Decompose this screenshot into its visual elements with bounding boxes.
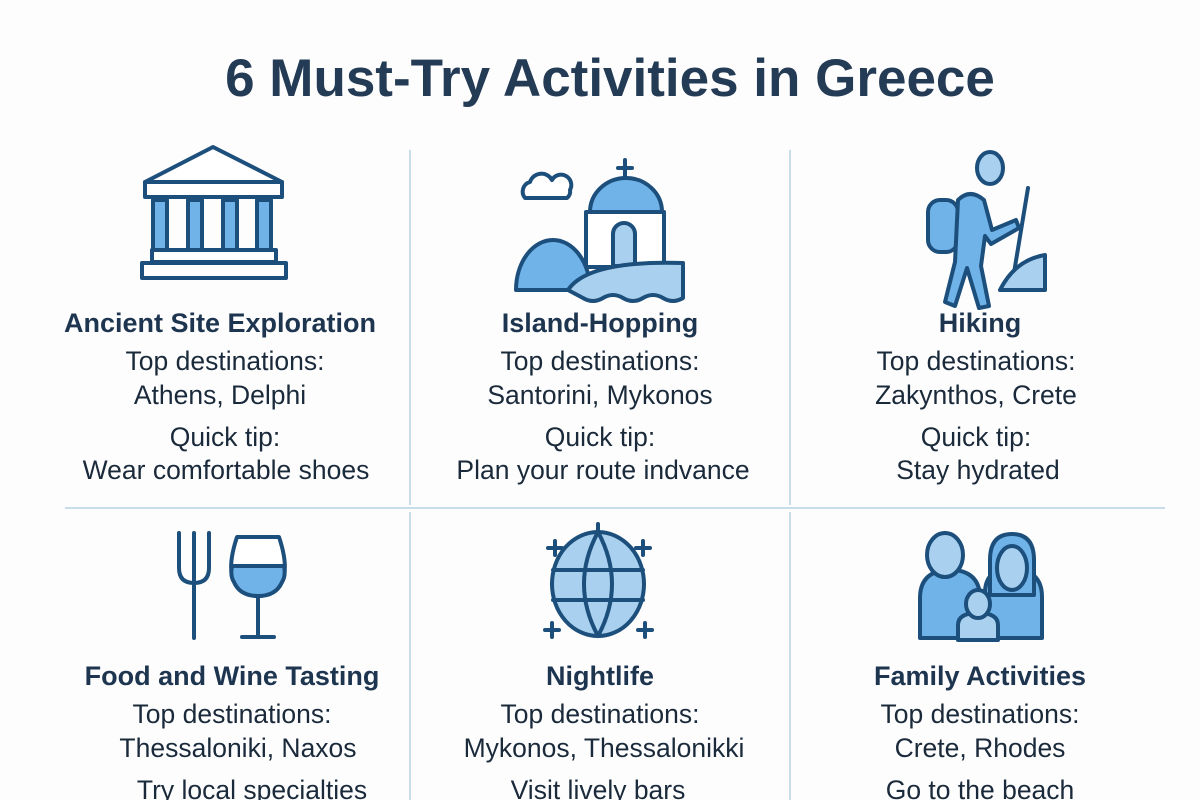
heading: Ancient Site Exploration xyxy=(64,308,376,338)
panel: ancient sites: Wear comfortable shoes xyxy=(83,455,369,485)
heading: Hiking xyxy=(939,308,1021,338)
heading: Family Activities xyxy=(874,661,1086,691)
heading: Food and Wine Tasting xyxy=(85,661,379,691)
text block: Top destinations: xyxy=(501,699,699,729)
panel: food and wine: Thessaloniki, Naxos xyxy=(119,733,357,763)
text block: Top destinations: xyxy=(501,346,699,376)
icon: disco ball xyxy=(545,524,652,637)
panel: family: Crete, Rhodes xyxy=(895,733,1065,763)
panel: hiking xyxy=(875,152,1077,485)
icon: family xyxy=(920,533,1042,640)
icon: hiker xyxy=(928,152,1045,308)
panel: family xyxy=(874,533,1086,800)
icon: island church xyxy=(516,160,683,301)
panel: ancient sites: Quick tip: xyxy=(170,422,280,452)
panel: hiking: Zakynthos, Crete xyxy=(875,380,1077,410)
panel: food and wine xyxy=(85,533,379,800)
panel: ancient sites: Athens, Delphi xyxy=(134,380,306,410)
text block: Top destinations: xyxy=(126,346,324,376)
panel: ancient sites xyxy=(64,147,376,485)
text block: Top destinations: xyxy=(881,699,1079,729)
panel: nightlife: Mykonos, Thessalonikki xyxy=(464,733,744,763)
panel: nightlife xyxy=(464,524,744,800)
panel: island hopping xyxy=(456,160,750,485)
text block: Top destinations: xyxy=(877,346,1075,376)
panel: island hopping: Plan your route indvance xyxy=(456,455,750,485)
heading: Island-Hopping xyxy=(502,308,698,338)
icon: fork and wine glass xyxy=(179,533,285,638)
text block: Top destinations: xyxy=(133,699,331,729)
title: 6 Must-Try Activities in Greece xyxy=(225,49,995,108)
panel: island hopping: Santorini, Mykonos xyxy=(487,380,713,410)
panel: island hopping: Quick tip: xyxy=(545,422,655,452)
heading: Nightlife xyxy=(546,661,654,691)
panel: hiking: Quick tip: xyxy=(921,422,1031,452)
panel: hiking: Stay hydrated xyxy=(896,455,1060,485)
icon: temple xyxy=(142,147,286,278)
